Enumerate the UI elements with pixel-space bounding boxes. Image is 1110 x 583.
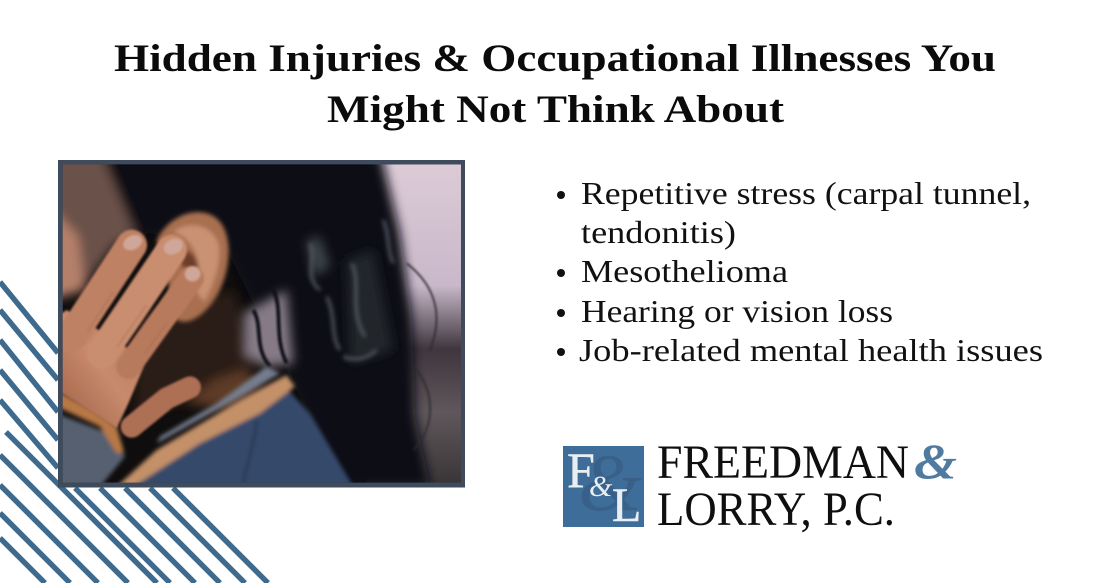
bullet: mesothelioma: Mesothelioma bbox=[581, 253, 788, 289]
bullet: repetitive stress: tendonitis) bbox=[581, 214, 736, 250]
decorative diagonal stripes bbox=[0, 282, 268, 583]
photo: woman holding her ear bbox=[50, 150, 465, 488]
logo mark: F&L square: L bbox=[612, 479, 641, 532]
ear bbox=[157, 212, 229, 322]
title bbox=[114, 37, 996, 131]
bullet: hearing or vision loss: Hearing or vision loss bbox=[581, 293, 893, 329]
logo mark: F&L square: & bbox=[589, 470, 613, 503]
logo wordmark: & bbox=[914, 433, 957, 489]
fingernails bbox=[121, 232, 202, 283]
logo mark: F&L square: F bbox=[567, 442, 595, 498]
title: Hidden Injuries & Occupational Illnesses You bbox=[114, 37, 996, 80]
bullet: repetitive stress: Repetitive stress (carpal tunnel, bbox=[581, 175, 1031, 211]
logo wordmark: FREEDMAN bbox=[657, 436, 909, 489]
photo scene bbox=[50, 150, 461, 487]
logo mark: F&L square: & bbox=[578, 437, 642, 528]
logo wordmark bbox=[657, 433, 957, 536]
grey hair highlights bbox=[243, 237, 393, 367]
sweater bbox=[57, 367, 353, 487]
photo frame bbox=[58, 160, 465, 488]
logo: Freedman & Lorry, P.C. bbox=[563, 433, 957, 536]
bullet: repetitive stress bbox=[557, 175, 1031, 250]
bullet list bbox=[557, 175, 1043, 368]
logo wordmark: LORRY, P.C. bbox=[657, 483, 895, 536]
hand bbox=[57, 245, 192, 428]
bullet: mental health: Job-related mental health issues bbox=[579, 332, 1043, 368]
title: Might Not Think About bbox=[327, 88, 784, 131]
